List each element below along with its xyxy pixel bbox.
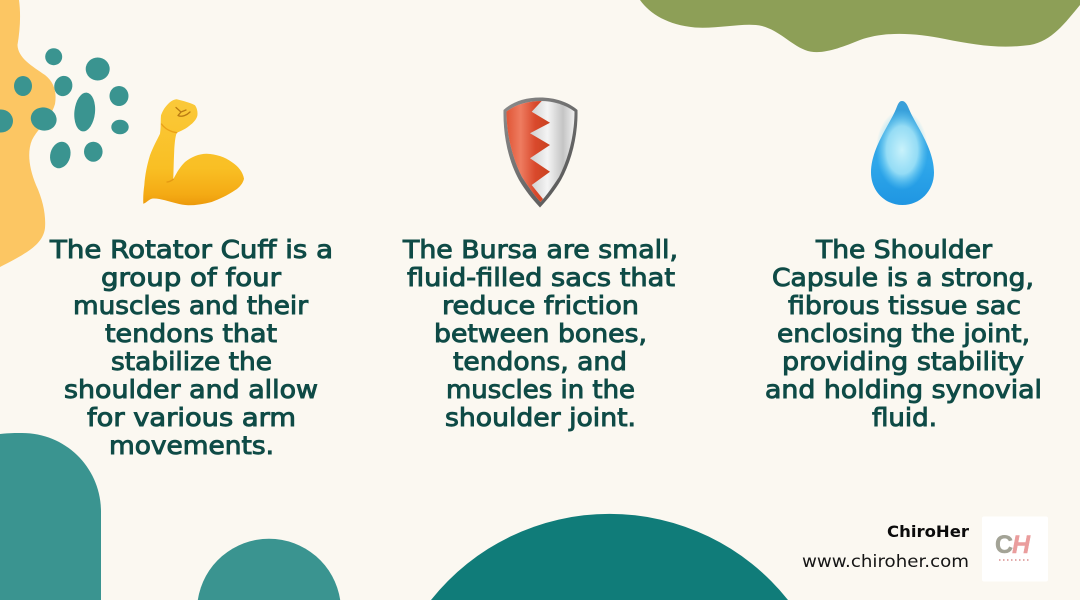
text block: bursa: tendons, and: [453, 347, 627, 376]
text block: rotator cuff: group of four: [101, 263, 282, 292]
text block: rotator cuff: stabilize the: [111, 347, 272, 376]
dots cluster: [0, 48, 129, 171]
text block: shoulder capsule: providing stability: [782, 347, 1024, 376]
text block: bursa: shoulder joint.: [445, 403, 636, 432]
icon: flexed biceps: [143, 99, 244, 205]
text block: rotator cuff: for various arm: [87, 403, 296, 432]
text block: bursa: The Bursa are small,: [402, 235, 678, 264]
brand name: ChiroHer: [887, 522, 969, 541]
text block: rotator cuff: shoulder and allow: [64, 375, 318, 404]
text block: shoulder capsule: fluid.: [872, 403, 937, 432]
logo: C: [995, 531, 1013, 559]
shape: yellow blob: [0, 0, 56, 267]
text block: shoulder capsule: [765, 235, 1042, 432]
text block: shoulder capsule: fibrous tissue sac: [788, 291, 1021, 320]
shape: dark teal dome bottom centre: [431, 514, 788, 600]
text block: bursa: between bones,: [434, 319, 647, 348]
text block: rotator cuff: muscles and their: [73, 291, 309, 320]
logo: H: [1012, 531, 1031, 559]
shape: teal semicircle bottom: [198, 539, 340, 600]
text block: rotator cuff: movements.: [109, 431, 274, 460]
text block: shoulder capsule: and holding synovial: [765, 375, 1042, 404]
text block: bursa: fluid-filled sacs that: [407, 263, 675, 292]
icon: shield: [503, 98, 578, 208]
text block: shoulder capsule: Capsule is a strong,: [772, 263, 1034, 292]
text block: bursa: muscles in the: [446, 375, 635, 404]
text block: shoulder capsule: The Shoulder: [815, 235, 993, 264]
text block: rotator cuff: The Rotator Cuff is a: [49, 235, 333, 264]
text block: bursa: [402, 235, 678, 432]
logo: [982, 516, 1048, 582]
text block: shoulder capsule: enclosing the joint,: [777, 319, 1030, 348]
text block: rotator cuff: tendons that: [105, 319, 277, 348]
website: www.chiroher.com: [802, 552, 969, 572]
text block: bursa: reduce friction: [442, 291, 639, 320]
shape: green wave: [640, 0, 1080, 52]
icon: water drop: [871, 101, 934, 205]
text block: rotator cuff: [49, 235, 333, 460]
shape: teal arch bottom left: [0, 433, 101, 600]
